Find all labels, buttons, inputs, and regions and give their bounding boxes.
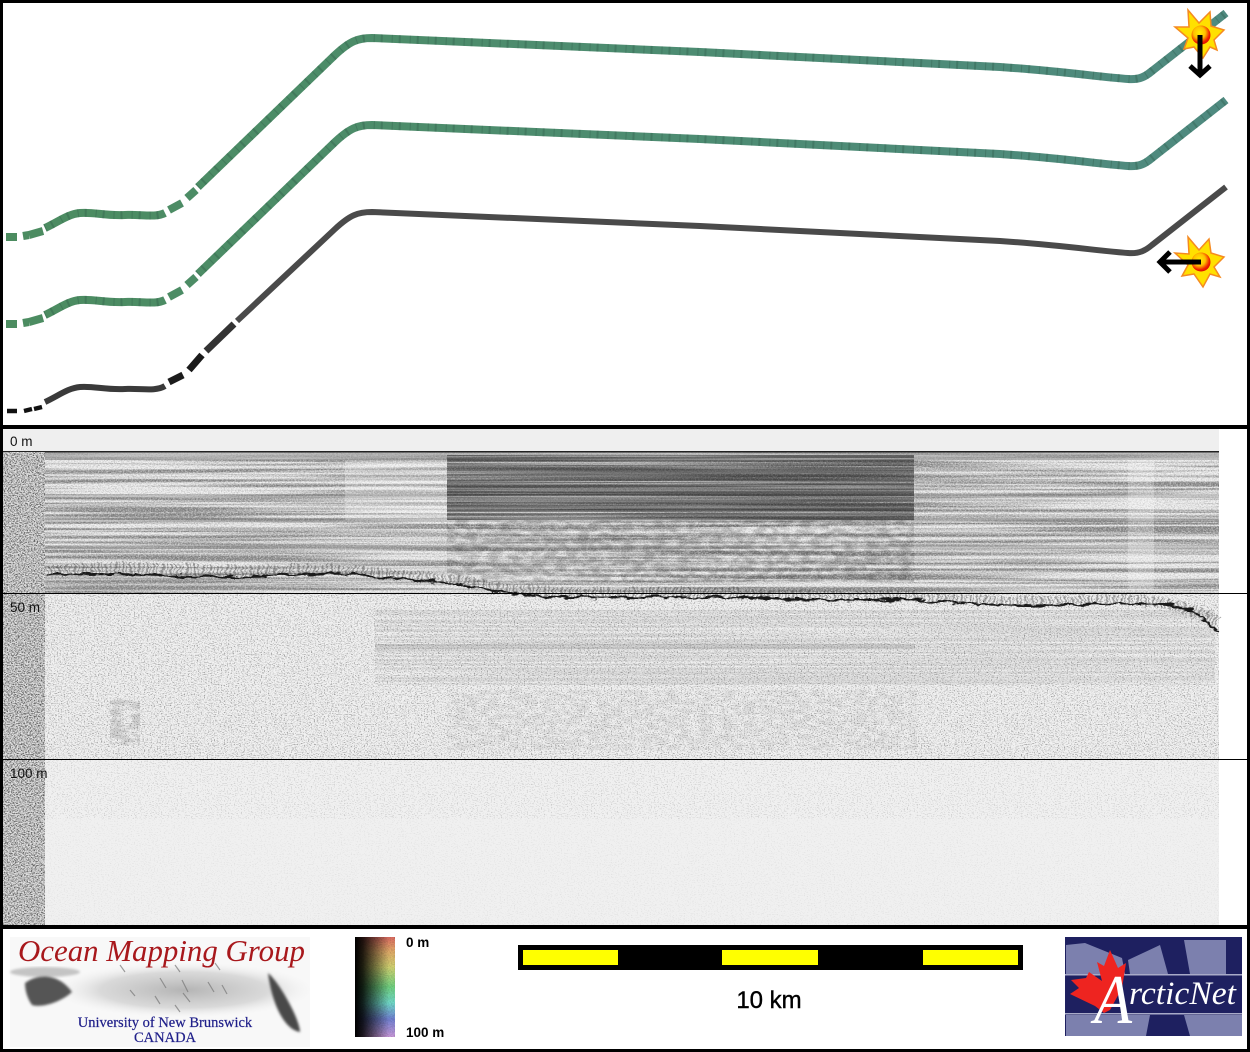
icon: starburst with downward arrow: [1175, 10, 1224, 75]
scale bar: [518, 945, 1023, 1014]
panel: sonar profile: [3, 429, 1247, 925]
logo: ArcticNet: A: [1090, 962, 1132, 1039]
depth label: 0 m: 0 m: [10, 434, 33, 449]
upper water column echoes: [3, 451, 1219, 593]
logo: Ocean Mapping Group: CANADA: [134, 1030, 197, 1046]
logo: Ocean Mapping Group: [10, 934, 310, 1047]
dark banded section: [447, 455, 914, 582]
logo: ArcticNet: rcticNet: [1129, 976, 1237, 1012]
logo: Ocean Mapping Group: Ocean Mapping Group: [18, 934, 305, 968]
panel: footer: [10, 934, 1242, 1047]
legend: depth colour bar: [355, 935, 444, 1040]
track: middle green swath: [6, 100, 1226, 324]
track: lower grey swath: [7, 187, 1226, 411]
panel: ship tracks: [6, 10, 1226, 411]
logo: ArcticNet: [1065, 937, 1242, 1039]
logo: Ocean Mapping Group: University of New Brunswick: [78, 1015, 253, 1031]
seafloor return: [46, 568, 1218, 630]
track: upper green swath: [6, 13, 1226, 237]
icon: starburst with leftward arrow: [1160, 237, 1224, 287]
depth label: 50 m: 50 m: [10, 600, 40, 615]
depth gridlines: [3, 594, 1247, 760]
scale bar: 10 km: [736, 987, 802, 1014]
depth label: 100 m: 100 m: [10, 766, 48, 781]
lower water column echoes: [45, 593, 1219, 759]
left noise column: [3, 452, 45, 925]
legend: depth colour bar: 100 m: [406, 1025, 444, 1040]
deep noise floor: [45, 759, 1219, 925]
legend: depth colour bar: 0 m: [406, 935, 429, 950]
